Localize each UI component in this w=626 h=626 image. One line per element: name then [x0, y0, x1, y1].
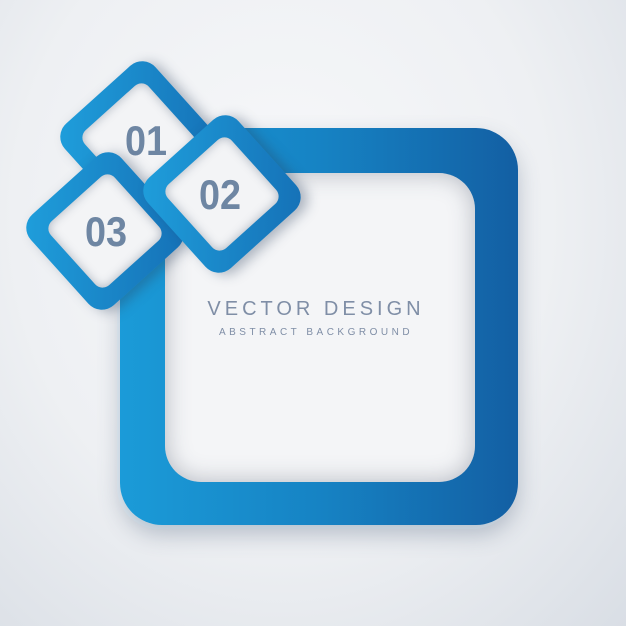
tile 01 [53, 54, 225, 226]
tile 03 [19, 145, 191, 317]
subtitle text: ABSTRACT BACKGROUND [219, 327, 413, 338]
title text: VECTOR DESIGN [207, 298, 425, 320]
number 01: 01 [125, 117, 167, 164]
number 02: 02 [199, 171, 241, 218]
tile 02 [136, 108, 308, 280]
inner white panel [165, 173, 475, 482]
main frame [120, 128, 518, 525]
number 03: 03 [85, 208, 127, 255]
